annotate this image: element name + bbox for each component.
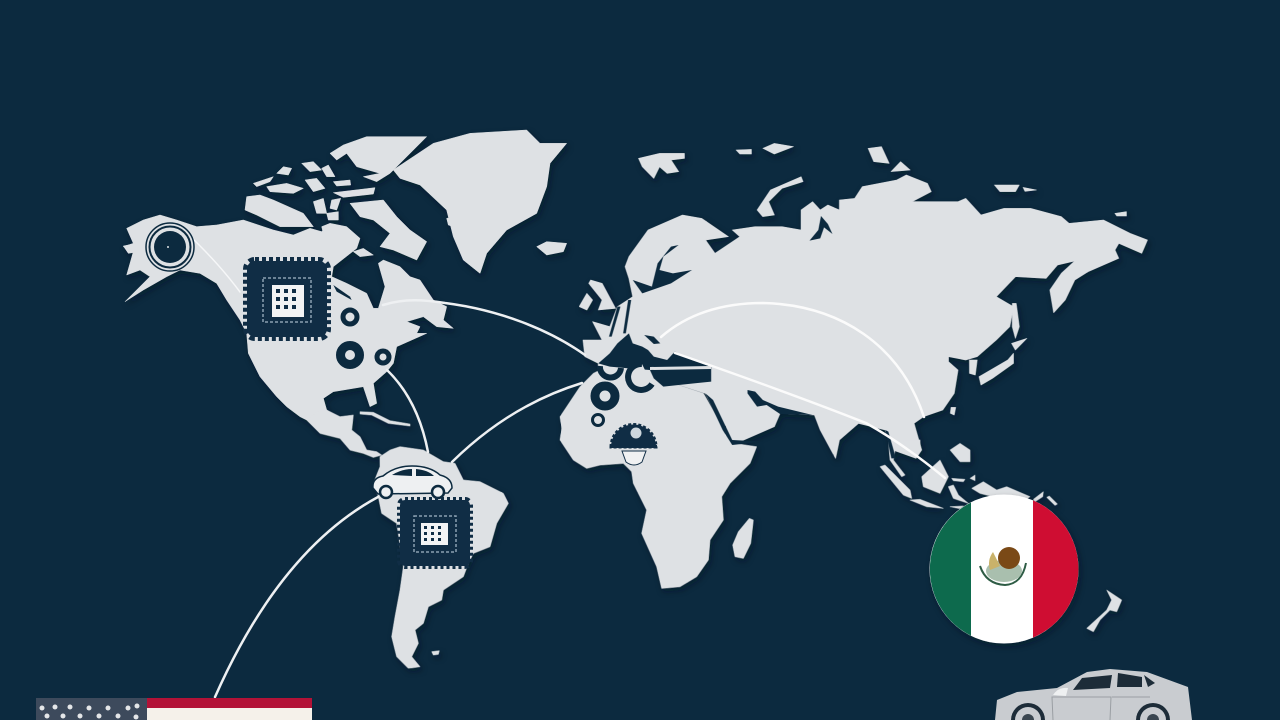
gulf of tonkin line xyxy=(885,430,896,458)
mexico flag circle xyxy=(930,494,1078,644)
arc: alaska to north america chip xyxy=(192,238,240,292)
icon: gears over north africa xyxy=(592,364,652,426)
southeast asia and new zealand xyxy=(880,440,1122,632)
white strip across the eastern mediterranean xyxy=(650,366,711,370)
icon: small car over south america xyxy=(373,466,452,498)
africa xyxy=(560,365,757,588)
icon: concentric target over alaska xyxy=(146,223,194,271)
red sea xyxy=(705,393,763,445)
silver car bottom right xyxy=(995,669,1192,720)
gulf of ob xyxy=(810,216,832,241)
arc: europe to southeast asia xyxy=(675,353,945,478)
arc: europe to china xyxy=(661,303,924,417)
baltic sea xyxy=(633,245,692,293)
arc: north america to europe xyxy=(383,300,585,355)
world map landmasses xyxy=(123,130,1147,668)
arc: usa flag to south america xyxy=(215,497,378,697)
icon: helmet over west africa xyxy=(610,424,657,465)
arc: south america to north africa xyxy=(452,383,582,462)
sakhalin and japan xyxy=(1012,303,1019,338)
north america, greenland and arctic islands xyxy=(123,130,567,420)
supply route arcs xyxy=(192,238,945,697)
madagascar xyxy=(733,518,753,558)
icon: chip over south america xyxy=(400,500,470,566)
central and south america xyxy=(307,365,757,668)
flag stars xyxy=(40,704,140,720)
arc: usa to south america north coast xyxy=(387,370,428,452)
icon: gears over north america xyxy=(340,310,389,364)
persian gulf and gulf of oman xyxy=(748,390,813,415)
inland seas and gulfs xyxy=(333,216,896,458)
icon: large chip over north america xyxy=(247,261,327,337)
usa flag bottom left xyxy=(36,698,312,720)
eurasia and arctic islands xyxy=(579,143,1147,458)
mexican coat of arms xyxy=(980,547,1026,585)
mediterranean and black seas xyxy=(598,333,711,387)
